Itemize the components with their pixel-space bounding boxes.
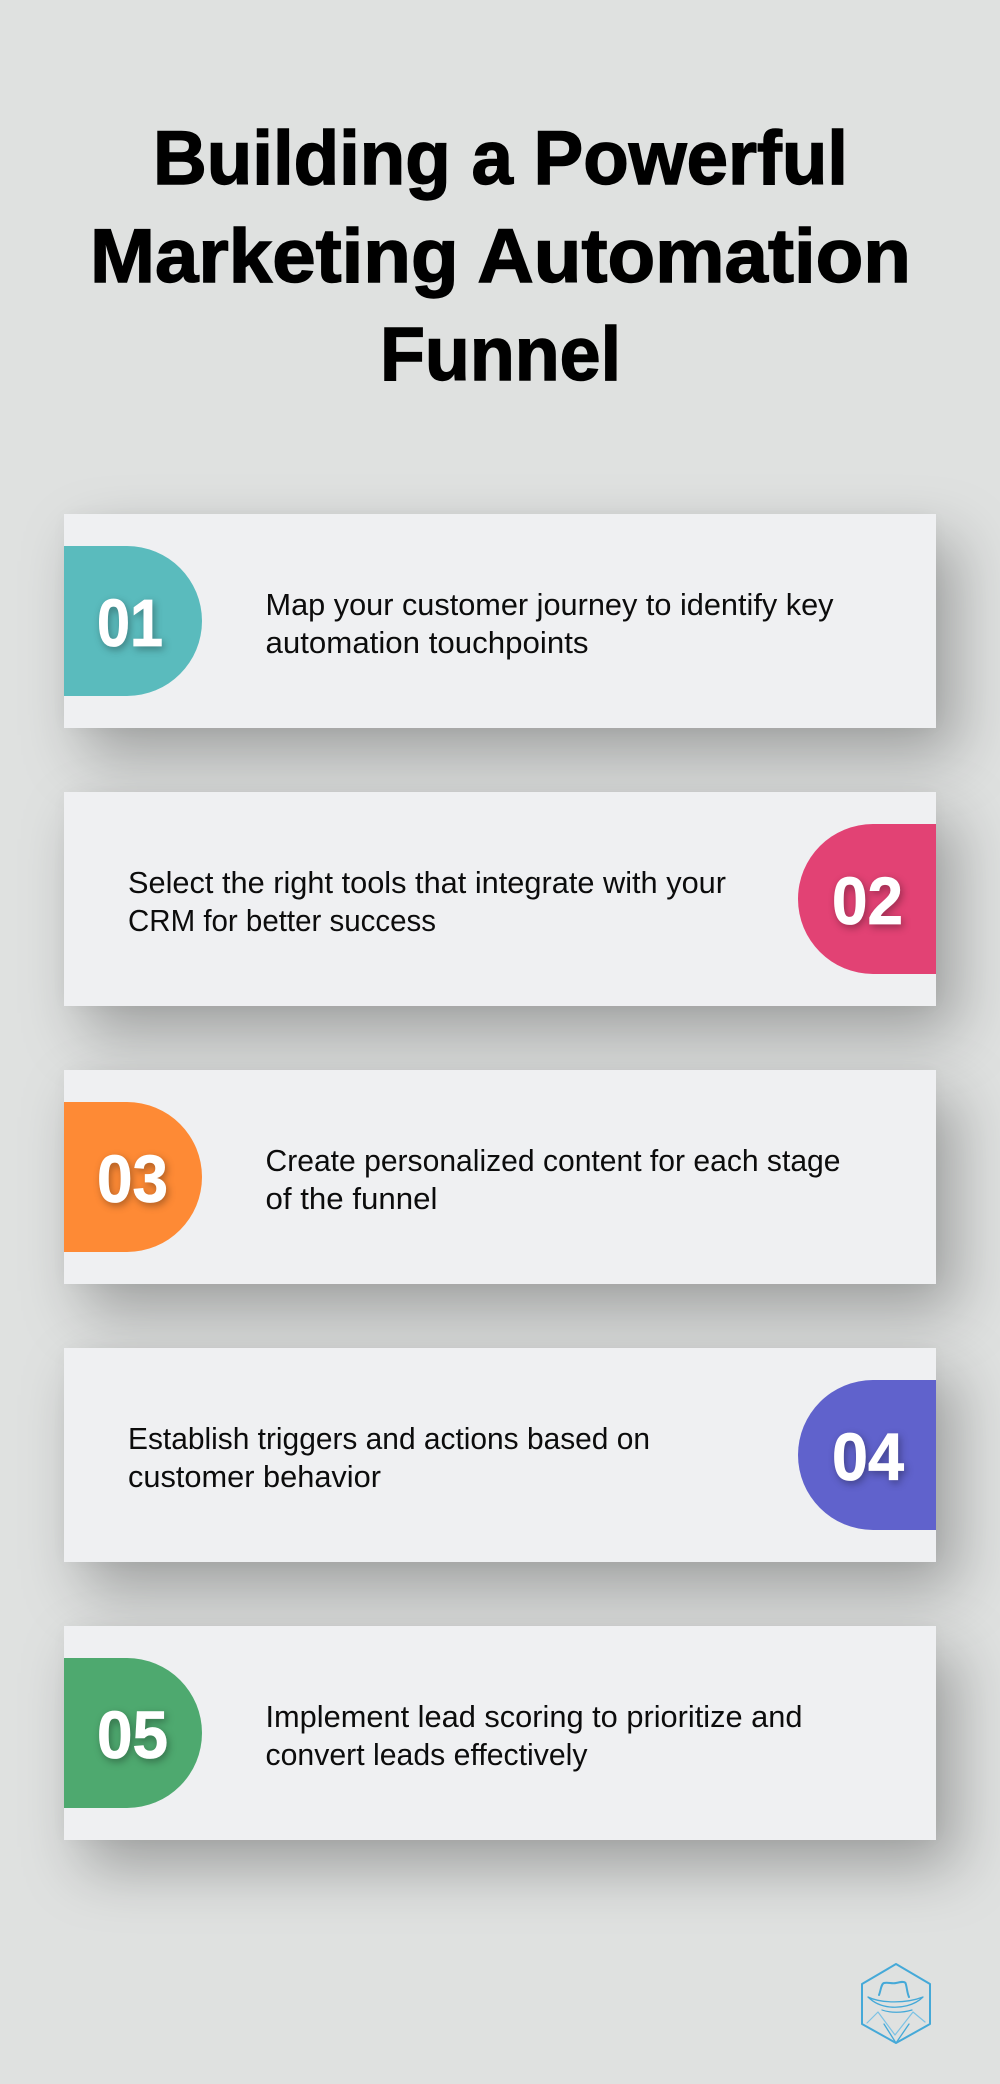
- panel: step 02: [64, 792, 936, 1006]
- text: step 01: Map your customer journey to identify key: [266, 588, 834, 622]
- panel: step 04: [64, 1348, 936, 1562]
- badge: 04: [798, 1380, 936, 1530]
- badge: 05: 05: [97, 1698, 168, 1773]
- text: step 03: Create personalized content for each stage: [266, 1144, 840, 1178]
- badge: 01: [64, 546, 202, 696]
- title: Marketing Automation: [90, 214, 911, 299]
- panel: step 03: [64, 1070, 936, 1284]
- text: step 01: automation touchpoints: [266, 626, 588, 660]
- badge: 04: 04: [832, 1420, 904, 1495]
- badge: 02: 02: [832, 864, 903, 939]
- title: Building a Powerful: [153, 116, 848, 201]
- text: step 05: [266, 1700, 802, 1772]
- text: step 02: [128, 866, 726, 938]
- text: step 04: customer behavior: [128, 1460, 381, 1494]
- text: step 04: [128, 1422, 650, 1494]
- icon: hexagon spy logo: [862, 1964, 930, 2043]
- text: step 05: Implement lead scoring to prioritize and: [266, 1700, 802, 1734]
- badge: 03: [64, 1102, 202, 1252]
- badge: 05: [64, 1658, 202, 1808]
- badge: 03: 03: [97, 1142, 168, 1217]
- title: Funnel: [380, 312, 621, 397]
- text: step 02: Select the right tools that integrate with your: [128, 866, 726, 900]
- badge: 02: [798, 824, 936, 974]
- text: step 03: of the funnel: [266, 1182, 438, 1216]
- text: step 05: convert leads effectively: [266, 1738, 588, 1772]
- text: step 03: [266, 1144, 840, 1216]
- title: [90, 116, 911, 397]
- panel: step 05: [64, 1626, 936, 1840]
- badge: 01: 01: [97, 586, 163, 661]
- text: step 04: Establish triggers and actions based on: [128, 1422, 650, 1456]
- panel: step 01: [64, 514, 936, 728]
- text: step 01: [266, 588, 834, 660]
- text: step 02: CRM for better success: [128, 904, 436, 938]
